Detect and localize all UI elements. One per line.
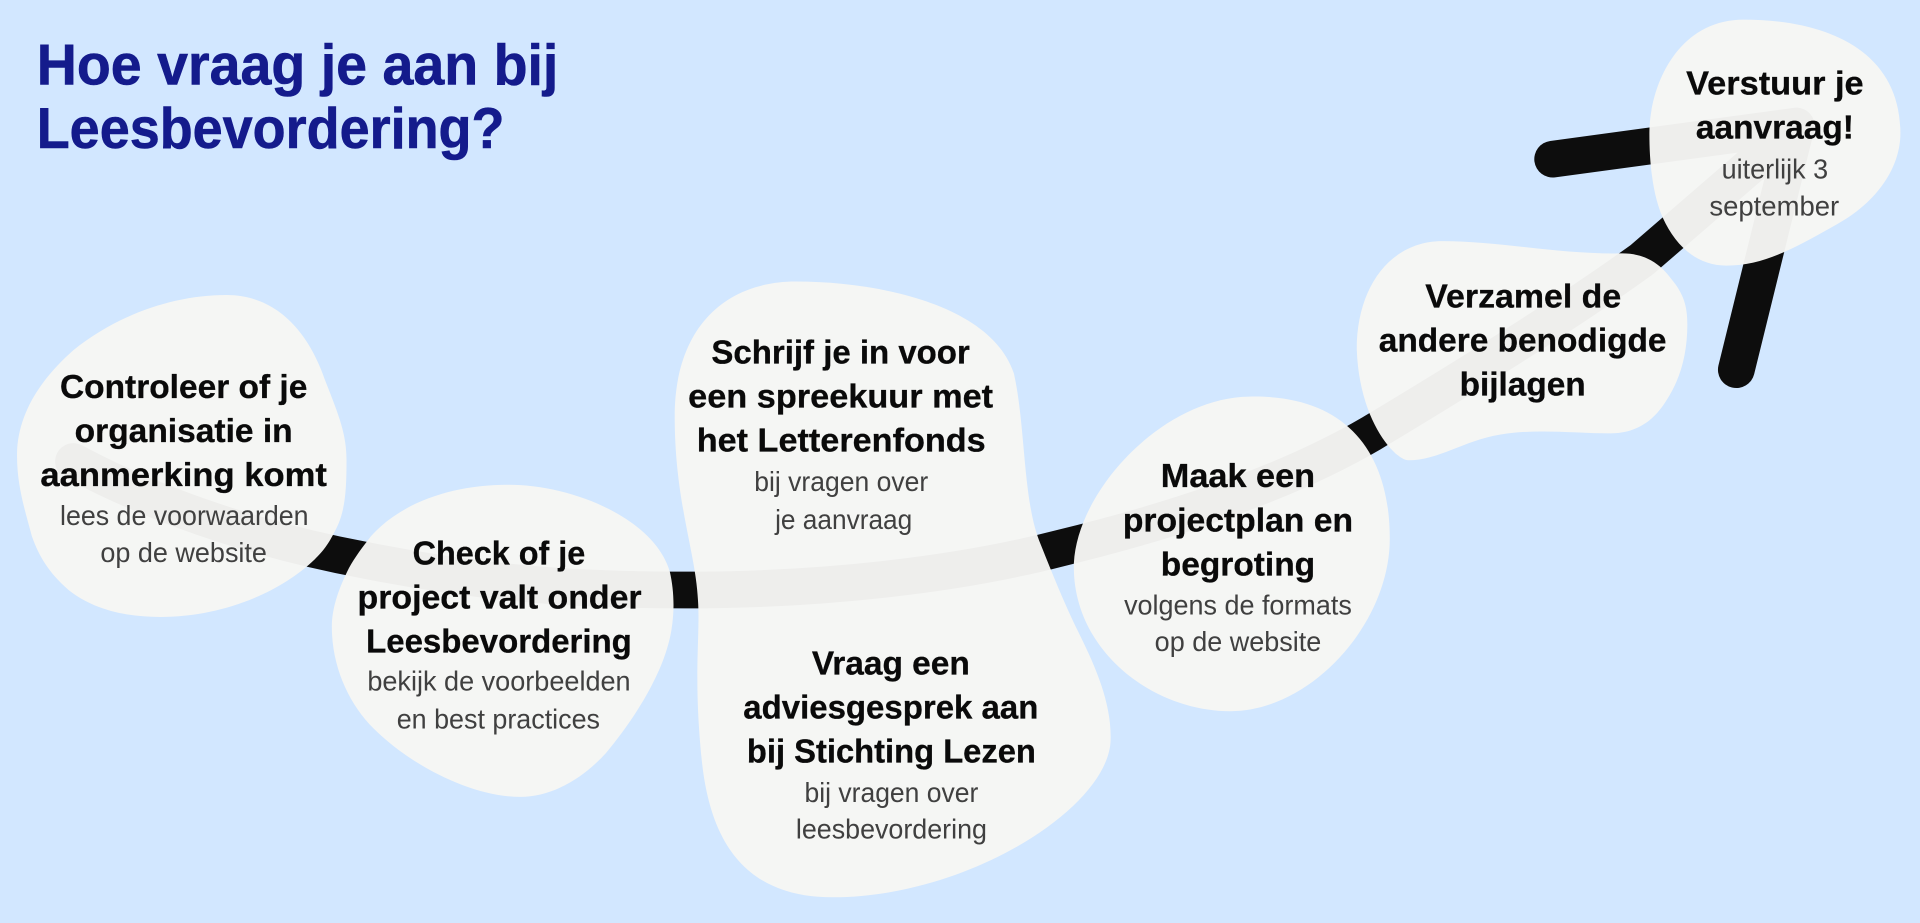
panel: step 6 verstuur: Verstuur je [1686,65,1864,102]
panel: step 3 spreekuur and adviesgesprek: adviesgesprek aan [743,690,1038,727]
panel: step 4 projectplan: begroting [1161,546,1315,583]
panel: step 2 check project: Leesbevordering [366,623,632,660]
panel: step 3 spreekuur and adviesgesprek: bij Stichting Lezen [747,734,1036,771]
panel: step 2 check project: project valt onder [358,579,642,616]
panel: step 1 controleer [17,295,347,617]
panel: step 4 projectplan: volgens de formats [1124,590,1352,621]
panel: step 3 spreekuur and adviesgesprek: bij vragen over [804,777,978,808]
panel: step 1 controleer: lees de voorwaarden [60,500,309,531]
title: Leesbevordering? [37,97,504,161]
panel: step 2 check project: Check of je [413,535,585,572]
title [37,33,558,161]
panel: step 1 controleer: Controleer of je [60,369,307,406]
panel: step 3 spreekuur and adviesgesprek: leesbevordering [796,814,987,845]
panel: step 4 projectplan [1074,397,1390,711]
panel: step 2 check project [332,485,674,797]
panel: step 3 spreekuur and adviesgesprek: Vraag een [812,646,970,682]
arrow: route through all steps [73,126,1796,590]
panel: step 3 spreekuur and adviesgesprek [675,282,1111,897]
panel: step 2 check project: en best practices [397,703,600,734]
panel: step 2 check project: bekijk de voorbeelden [367,665,631,696]
panel: step 5 bijlagen: bijlagen [1460,366,1586,403]
panel: step 4 projectplan: projectplan en [1123,502,1353,539]
panel: step 3 spreekuur and adviesgesprek: het Letterenfonds [697,423,986,460]
title: Hoe vraag je aan bij [37,33,558,97]
panel: step 1 controleer: aanmerking komt [40,457,327,494]
panel: step 3 spreekuur and adviesgesprek: Schrijf je in voor [711,335,970,372]
panel: step 6 verstuur: aanvraag! [1696,109,1854,146]
panel: step 6 verstuur: september [1709,190,1839,221]
panel: step 4 projectplan: Maak een [1161,458,1315,495]
panel: step 5 bijlagen: Verzamel de [1425,278,1621,315]
panel: step 1 controleer: organisatie in [75,413,293,450]
panel: step 3 spreekuur and adviesgesprek: een spreekuur met [688,379,993,416]
panel: step 6 verstuur [1649,20,1900,266]
panel: step 4 projectplan: op de website [1155,626,1321,657]
panel: step 5 bijlagen [1357,241,1687,460]
panel: step 3 spreekuur and adviesgesprek: bij vragen over [754,466,928,497]
panel: step 3 spreekuur and adviesgesprek: je aanvraag [774,504,912,535]
panel: step 5 bijlagen: andere benodigde [1379,322,1667,359]
panel: step 1 controleer: op de website [100,537,267,568]
panel: step 6 verstuur: uiterlijk 3 [1722,154,1828,185]
